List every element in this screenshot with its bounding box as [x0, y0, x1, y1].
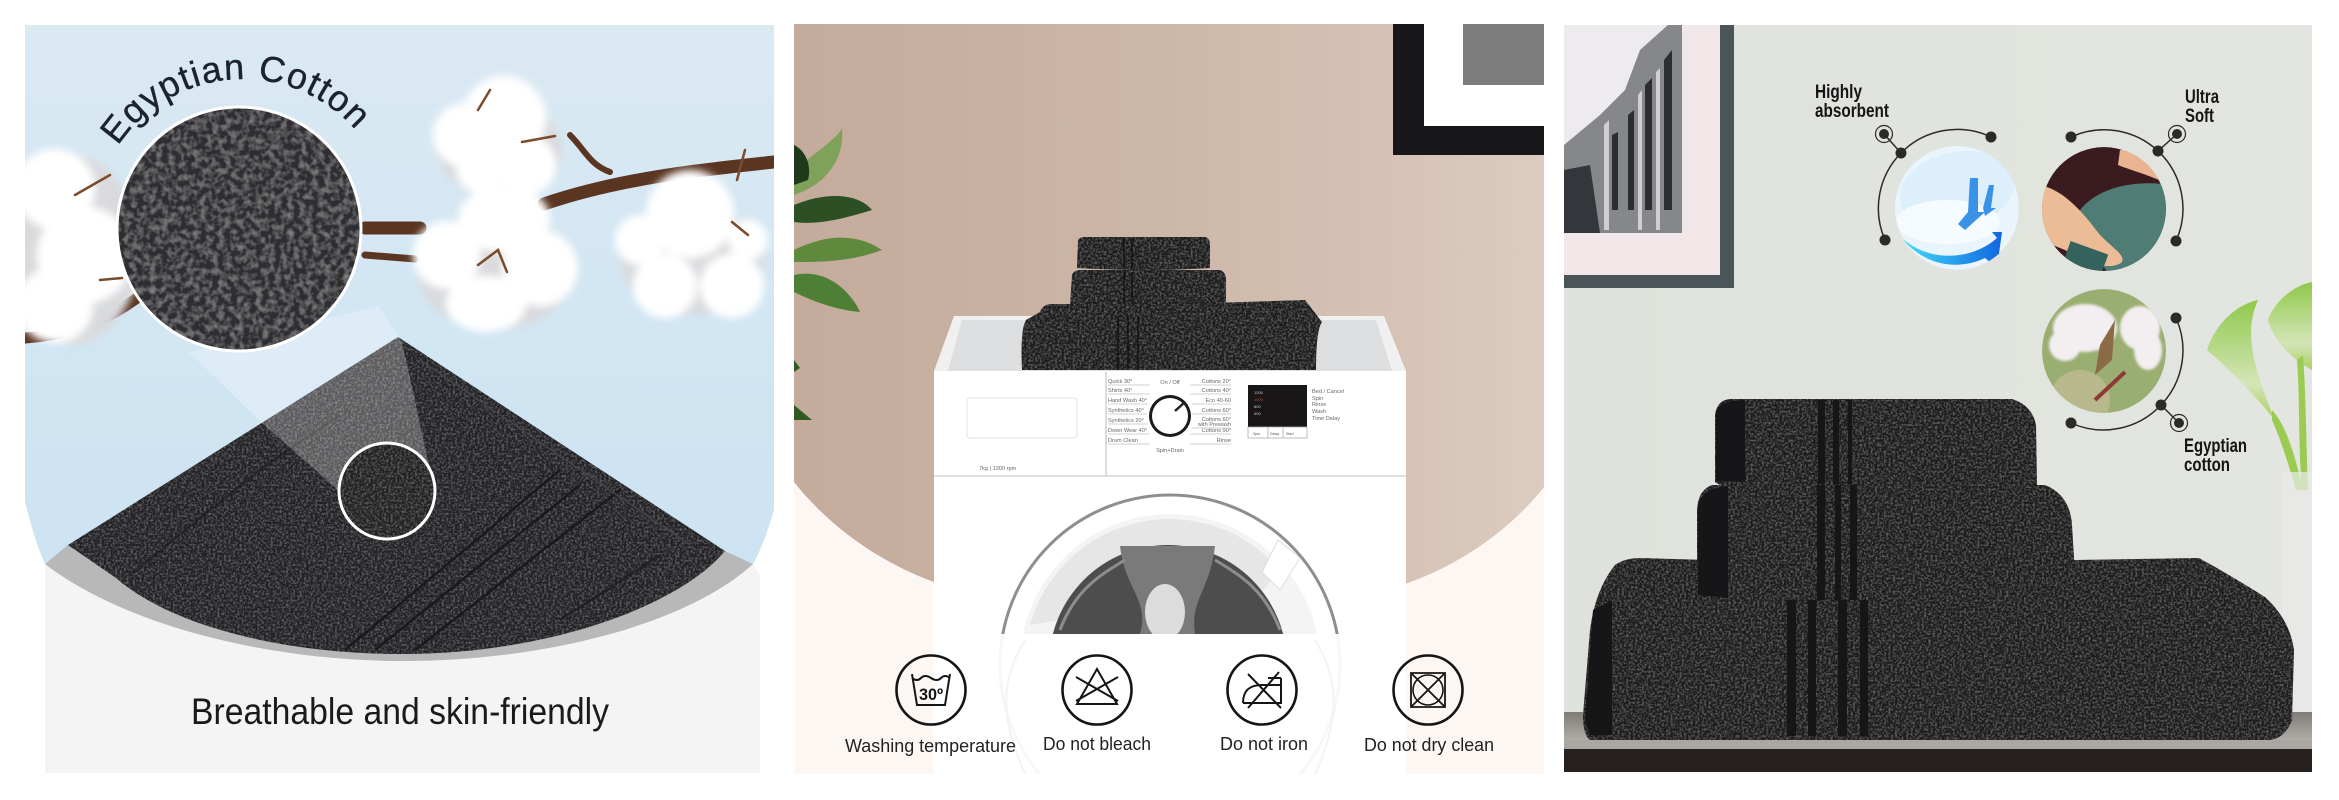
- program labels: Hand Wash 40°: [1108, 398, 1147, 404]
- white lower fade: [998, 634, 1342, 774]
- care icon: do not bleach: [1062, 656, 1132, 724]
- display panel: 1000: [1254, 397, 1264, 402]
- program labels: Drum Clean: [1108, 438, 1138, 444]
- hand towel hem and ribs: [1698, 484, 1857, 600]
- egyptian cotton label: [2184, 436, 2247, 476]
- program labels: Spin+Drain: [1156, 448, 1184, 454]
- panel: towel set features: [1564, 25, 2312, 772]
- selector dial: [1149, 395, 1191, 437]
- washing machine: [934, 316, 1406, 634]
- plant leaves: [2207, 282, 2312, 490]
- care icon: do not iron: [1228, 656, 1296, 724]
- washer door: [1001, 494, 1339, 634]
- egyptian cotton label: cotton: [2184, 455, 2230, 476]
- program labels: Bed / Cancel: [1312, 389, 1344, 395]
- panel: Egyptian cotton close-up: [25, 25, 774, 773]
- care icon: washing temperature 30: [896, 656, 966, 724]
- program labels: Cottons 60°: [1202, 417, 1231, 423]
- program labels: Cottons 90°: [1202, 428, 1231, 434]
- medium hand towel: [1697, 485, 2076, 600]
- program labels: Quick 30°: [1108, 379, 1132, 385]
- panel: laundry care: [794, 24, 1544, 800]
- door ghost through fade: [1006, 640, 1334, 774]
- program labels: Rinse: [1217, 438, 1231, 444]
- framed city photo: [1564, 25, 1734, 288]
- display panel: Start: [1286, 432, 1294, 436]
- ultra soft label: Soft: [2185, 106, 2215, 127]
- beige wall: [794, 24, 1544, 584]
- feature: ultra soft: [2040, 87, 2219, 278]
- care label: do not dry clean: Do not dry clean: [1364, 735, 1494, 755]
- big magnified terry circle: [117, 107, 361, 351]
- caption: Breathable and skin-friendly: [191, 691, 609, 732]
- program labels: Spin: [1312, 396, 1323, 402]
- absorbent label: absorbent: [1815, 101, 1890, 122]
- folded black towel corner: [68, 337, 725, 654]
- program labels: Shirts 40°: [1108, 388, 1132, 394]
- towel stack ribs: [1118, 238, 1138, 370]
- care label: washing temperature: Washing temperature: [845, 736, 1016, 756]
- program labels: Wash: [1312, 409, 1326, 415]
- care icon: washing temperature 30: 30º: [919, 685, 943, 704]
- curved title: Egyptian Cotton: [100, 56, 366, 144]
- gray towel shadow crescent: [45, 545, 753, 661]
- face towel hem and ribs: [1716, 400, 1852, 484]
- display panel: 1200: [1254, 390, 1264, 395]
- program labels: with Prewash: [1197, 422, 1231, 428]
- bath towel hem and ribs: [1585, 597, 1868, 736]
- display panel: Delay: [1270, 432, 1279, 436]
- program labels: Eco 40-60: [1206, 398, 1231, 404]
- ultra soft image: hand on towel: [2040, 147, 2170, 278]
- cotton bolls: [0, 76, 768, 345]
- black towel stack on washer: [1022, 237, 1322, 370]
- program labels: Cottons 20°: [1202, 379, 1231, 385]
- program lines: [1108, 385, 1231, 444]
- cotton husk details: [75, 90, 748, 280]
- egyptian cotton image: boll in field: [2042, 289, 2166, 430]
- care icon: do not dry clean: [1394, 656, 1462, 724]
- absorbent ring and nodes: [1876, 126, 1996, 246]
- care label: do not bleach: Do not bleach: [1043, 734, 1151, 754]
- program labels: Synthetics 20°: [1108, 418, 1144, 424]
- plant: [794, 128, 882, 420]
- program labels: Time Delay: [1312, 416, 1340, 422]
- program labels: Rinse: [1312, 402, 1326, 408]
- shelf: [1564, 712, 2312, 772]
- large bath towel: [1583, 558, 2294, 740]
- small magnifier ring: [339, 443, 435, 539]
- picture frame: [1393, 24, 1544, 155]
- detergent drawer: [967, 398, 1077, 438]
- magnifier cone: [189, 306, 431, 490]
- pale wall: [1564, 25, 2312, 725]
- program labels: [979, 379, 1344, 472]
- cotton branch: [25, 135, 774, 338]
- off-white floor arc: [794, 482, 1544, 774]
- display panel: [1248, 385, 1307, 438]
- feature: highly absorbent: [1815, 82, 2022, 270]
- program labels: On / Off: [1160, 380, 1180, 386]
- display panel: 800: [1254, 404, 1261, 409]
- egyptian cotton label: Egyptian: [2184, 436, 2247, 457]
- absorbent label: Highly: [1815, 82, 1862, 103]
- small face towel: [1715, 399, 2037, 485]
- display panel: 600: [1254, 411, 1261, 416]
- ultra soft ring and nodes: [2066, 126, 2186, 246]
- program labels: Cottons 40°: [1202, 388, 1231, 394]
- background: pale blue sky: [25, 25, 774, 568]
- display panel: Spin: [1253, 432, 1260, 436]
- caption card: [45, 564, 760, 773]
- feature: egyptian cotton: [2042, 289, 2247, 476]
- ultra soft label: Ultra: [2185, 87, 2219, 108]
- absorbent label: [1815, 82, 1890, 122]
- program labels: 7kg | 1200 rpm: [979, 466, 1017, 472]
- egyptian cotton ring and nodes: [2066, 312, 2188, 432]
- care label: do not iron: Do not iron: [1220, 734, 1308, 754]
- white lower panel behind arc: [25, 502, 774, 665]
- program labels: Synthetics 40°: [1108, 408, 1144, 414]
- program labels: Down Wear 40°: [1108, 428, 1147, 434]
- glass vase: [2282, 472, 2312, 712]
- absorbent image: [1892, 141, 2022, 270]
- program labels: Cottons 60°: [1202, 408, 1231, 414]
- towel dobby stripes: [130, 360, 690, 650]
- ultra soft label: [2185, 87, 2219, 127]
